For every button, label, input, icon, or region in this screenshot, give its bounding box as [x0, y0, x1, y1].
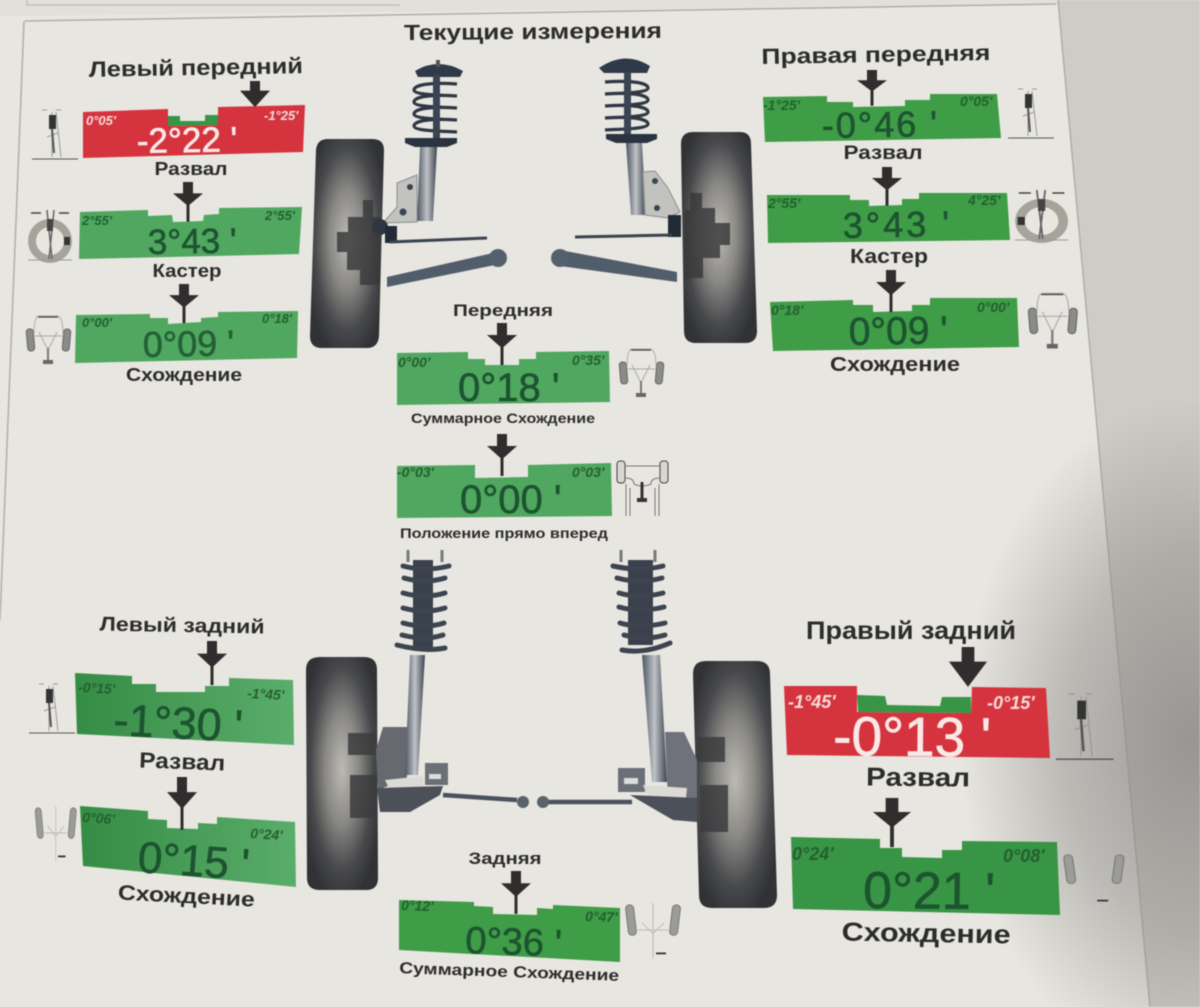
gauge: right rear toe	[791, 837, 1060, 921]
arrow	[876, 270, 906, 312]
heading: front: Передняя	[453, 301, 553, 320]
icon: straight ahead	[617, 461, 668, 516]
heading: left rear: Левый задний	[99, 614, 265, 638]
gauge: right front caster: 2°55'	[767, 195, 801, 211]
gauge: straight ahead	[397, 463, 612, 522]
gauge: left front toe	[75, 311, 298, 365]
gauge: left front camber: 0°05'	[86, 113, 117, 128]
gauge: right front caster: 4°25'	[967, 192, 1001, 208]
icon: toe right front	[1028, 293, 1078, 348]
gauge: total toe rear: 0°36 '	[465, 920, 563, 965]
icon: toe left front	[26, 316, 71, 364]
icon: caster right front	[1015, 190, 1068, 240]
title: Текущие измерения	[404, 18, 662, 45]
gauge: right rear toe: 0°24'	[792, 844, 834, 864]
rear right suspension	[537, 550, 777, 908]
group: left front	[26, 53, 305, 385]
arrow	[197, 641, 227, 685]
gauge: left front caster	[79, 207, 302, 262]
gauge: right front toe: 0°00'	[977, 299, 1010, 315]
gauge: left front toe: 0°00'	[82, 315, 113, 330]
gauge: right rear camber: -0°13 '	[833, 705, 991, 768]
icon: toe front	[619, 349, 664, 397]
gauge: left front camber	[83, 105, 305, 161]
gauge: left rear camber: -0°15'	[78, 679, 116, 697]
gauge: right front toe	[770, 298, 1019, 354]
gauge: left front caster: 2°55'	[81, 213, 113, 228]
arrow	[167, 777, 197, 830]
arrow	[487, 323, 517, 365]
front right suspension	[551, 58, 757, 343]
gauge: left rear toe: 0°24'	[250, 825, 284, 843]
gauge: left front toe: 0°09 '	[142, 322, 234, 365]
rear left tire	[306, 657, 378, 890]
group: rear centre	[399, 849, 681, 985]
heading: rear: Задняя	[468, 849, 542, 868]
icon: caster left front	[28, 210, 72, 260]
gauge: right front camber: -1°25'	[763, 97, 801, 113]
group: left rear	[29, 614, 296, 912]
gauge: total toe front: 0°18 '	[458, 366, 559, 410]
gauge: total toe front	[397, 351, 610, 410]
gauge: right front camber: 0°05'	[960, 93, 993, 109]
label: straight ahead: Положение прямо вперед	[400, 525, 608, 541]
gauge: left rear camber: -1°30 '	[112, 694, 244, 752]
icon: camber left rear	[29, 684, 75, 733]
gauge: straight ahead: 0°00 '	[460, 478, 561, 522]
label: camber: Развал	[139, 748, 226, 775]
icon: camber left front	[32, 110, 78, 159]
label: total toe: Суммарное Схождение	[399, 960, 619, 985]
icon: camber right rear	[1056, 694, 1114, 759]
gauge: straight ahead: -0°03'	[397, 464, 435, 480]
arrow	[501, 871, 531, 914]
label: caster: Кастер	[152, 261, 222, 281]
label: camber: Развал	[154, 159, 228, 179]
label: toe: Схождение	[117, 881, 255, 912]
group: front centre	[397, 301, 668, 541]
gauge: right front toe: 0°09 '	[848, 309, 948, 354]
gauge: left front caster: 3°43 '	[147, 221, 237, 262]
gauge: left rear toe: 0°15 '	[136, 833, 251, 890]
arrow	[487, 434, 517, 476]
front right tire	[681, 132, 757, 343]
arrow	[173, 182, 203, 222]
icon: toe rear	[625, 903, 681, 959]
heading: left front: Левый передний	[89, 53, 303, 82]
label: camber: Развал	[844, 143, 922, 164]
label: caster: Кастер	[850, 246, 928, 268]
gauge: left front camber: -1°25'	[264, 108, 299, 123]
arrow	[169, 284, 199, 323]
gauge: total toe front: 0°35'	[572, 352, 605, 368]
gauge: right front toe: 0°18'	[771, 302, 804, 318]
gauge: right front camber	[763, 93, 1001, 146]
gauge: left front camber: -2°22 '	[136, 120, 238, 161]
gauge: left front toe: 0°18'	[262, 311, 293, 326]
heading: right front: Правая передняя	[761, 40, 991, 69]
gauge: right rear camber: -1°45'	[788, 692, 836, 712]
arrow	[240, 81, 270, 107]
gauge: total toe rear: 0°12'	[401, 897, 434, 914]
gauge: left rear toe: 0°06'	[82, 809, 116, 827]
front left tire	[310, 139, 384, 348]
heading: right rear: Правый задний	[806, 617, 1016, 645]
label: toe: Схождение	[830, 354, 960, 376]
gauge: right rear camber: -0°15'	[987, 693, 1035, 713]
label: toe: Схождение	[126, 365, 242, 385]
front left suspension	[310, 60, 507, 348]
gauge: left front caster: 2°55'	[264, 208, 296, 223]
label: camber: Развал	[866, 762, 970, 792]
arrow	[857, 70, 887, 106]
group: right front	[761, 40, 1078, 376]
gauge: right front caster: 3°43 '	[842, 203, 952, 246]
gauge: right front caster	[767, 192, 1010, 246]
gauge: total toe rear: 0°47'	[585, 908, 618, 925]
icon: toe left rear	[35, 806, 77, 862]
gauge: left rear camber	[75, 673, 294, 752]
gauge: right rear camber	[784, 686, 1050, 768]
rear left suspension	[306, 550, 529, 890]
gauge: left rear camber: -1°45'	[247, 685, 285, 703]
rear right tire	[693, 661, 777, 908]
arrow	[873, 798, 911, 847]
icon: toe right rear	[1063, 853, 1124, 906]
label: toe: Схождение	[841, 917, 1011, 949]
arrow	[949, 647, 987, 687]
group: right rear	[784, 617, 1124, 949]
gauge: straight ahead: 0°03'	[572, 464, 605, 480]
gauge: left rear toe	[80, 806, 296, 890]
gauge: total toe rear	[399, 897, 620, 965]
gauge: right rear toe: 0°21 '	[863, 862, 995, 921]
gauge: total toe front: 0°00'	[398, 354, 431, 370]
icon: camber right front	[1008, 89, 1054, 138]
label: total toe: Суммарное Схождение	[411, 410, 595, 426]
gauge: right front camber: -0°46 '	[821, 103, 939, 146]
arrow	[872, 167, 902, 206]
gauge: right rear toe: 0°08'	[1003, 846, 1045, 866]
